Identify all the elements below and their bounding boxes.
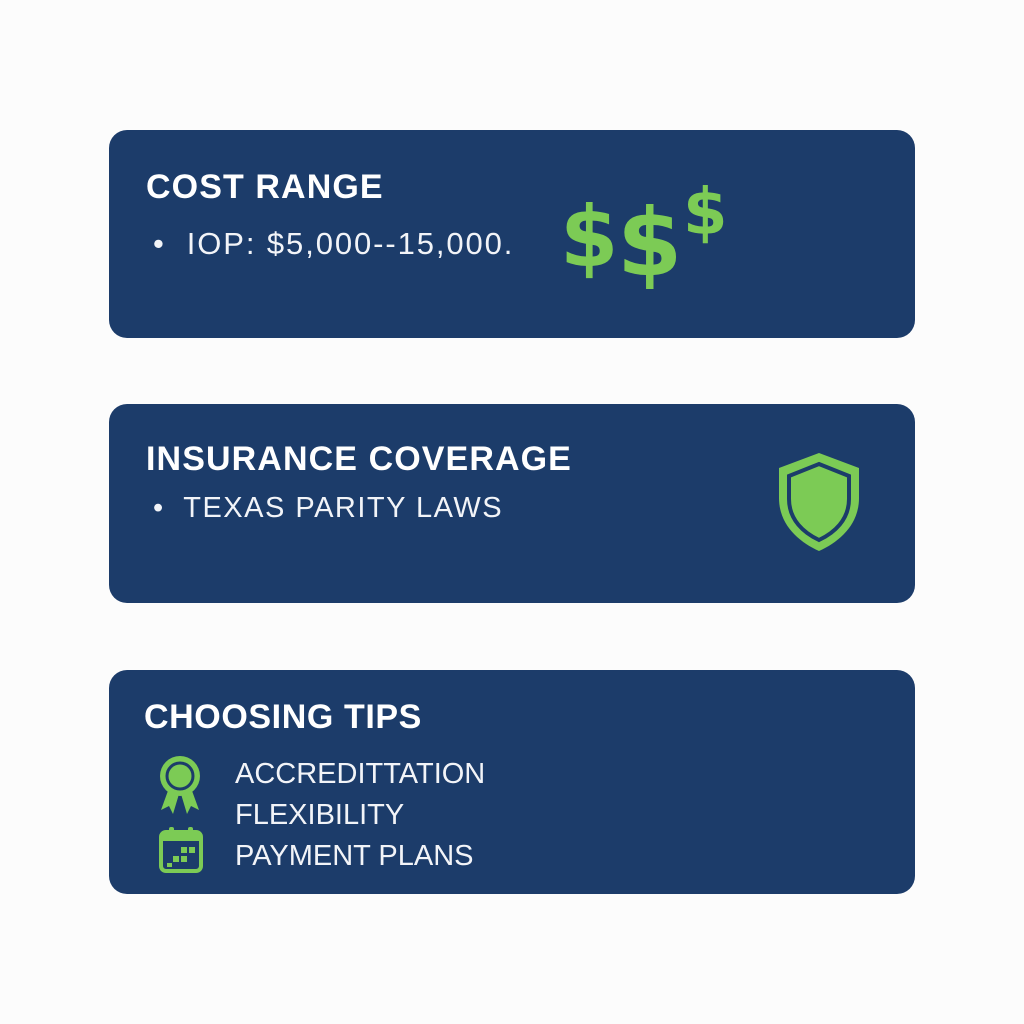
heading: choosing tips: CHOOSING TIPS [144,698,422,736]
text: tips list: FLEXIBILITY [235,799,404,831]
panel: cost range [109,130,915,338]
text: tips list: PAYMENT PLANS [235,840,474,872]
text: IOP cost: • IOP: $5,000--15,000. [153,226,514,261]
panel: insurance coverage [109,404,915,603]
text: tips list [235,758,485,872]
icon: award ribbon [160,756,200,814]
icon: dollar signs: $ [617,189,682,298]
panel: choosing tips [109,670,915,894]
icon: dollar signs: $ [683,176,728,250]
text: parity laws: • TEXAS PARITY LAWS [153,492,503,524]
heading: cost range: COST RANGE [146,168,384,206]
heading: insurance coverage: INSURANCE COVERAGE [146,440,572,478]
icon: shield [779,453,859,551]
icon: dollar signs [560,176,728,298]
text: tips list: ACCREDITTATION [235,758,485,790]
icon: calendar [159,827,203,873]
icon: dollar signs: $ [560,188,618,286]
